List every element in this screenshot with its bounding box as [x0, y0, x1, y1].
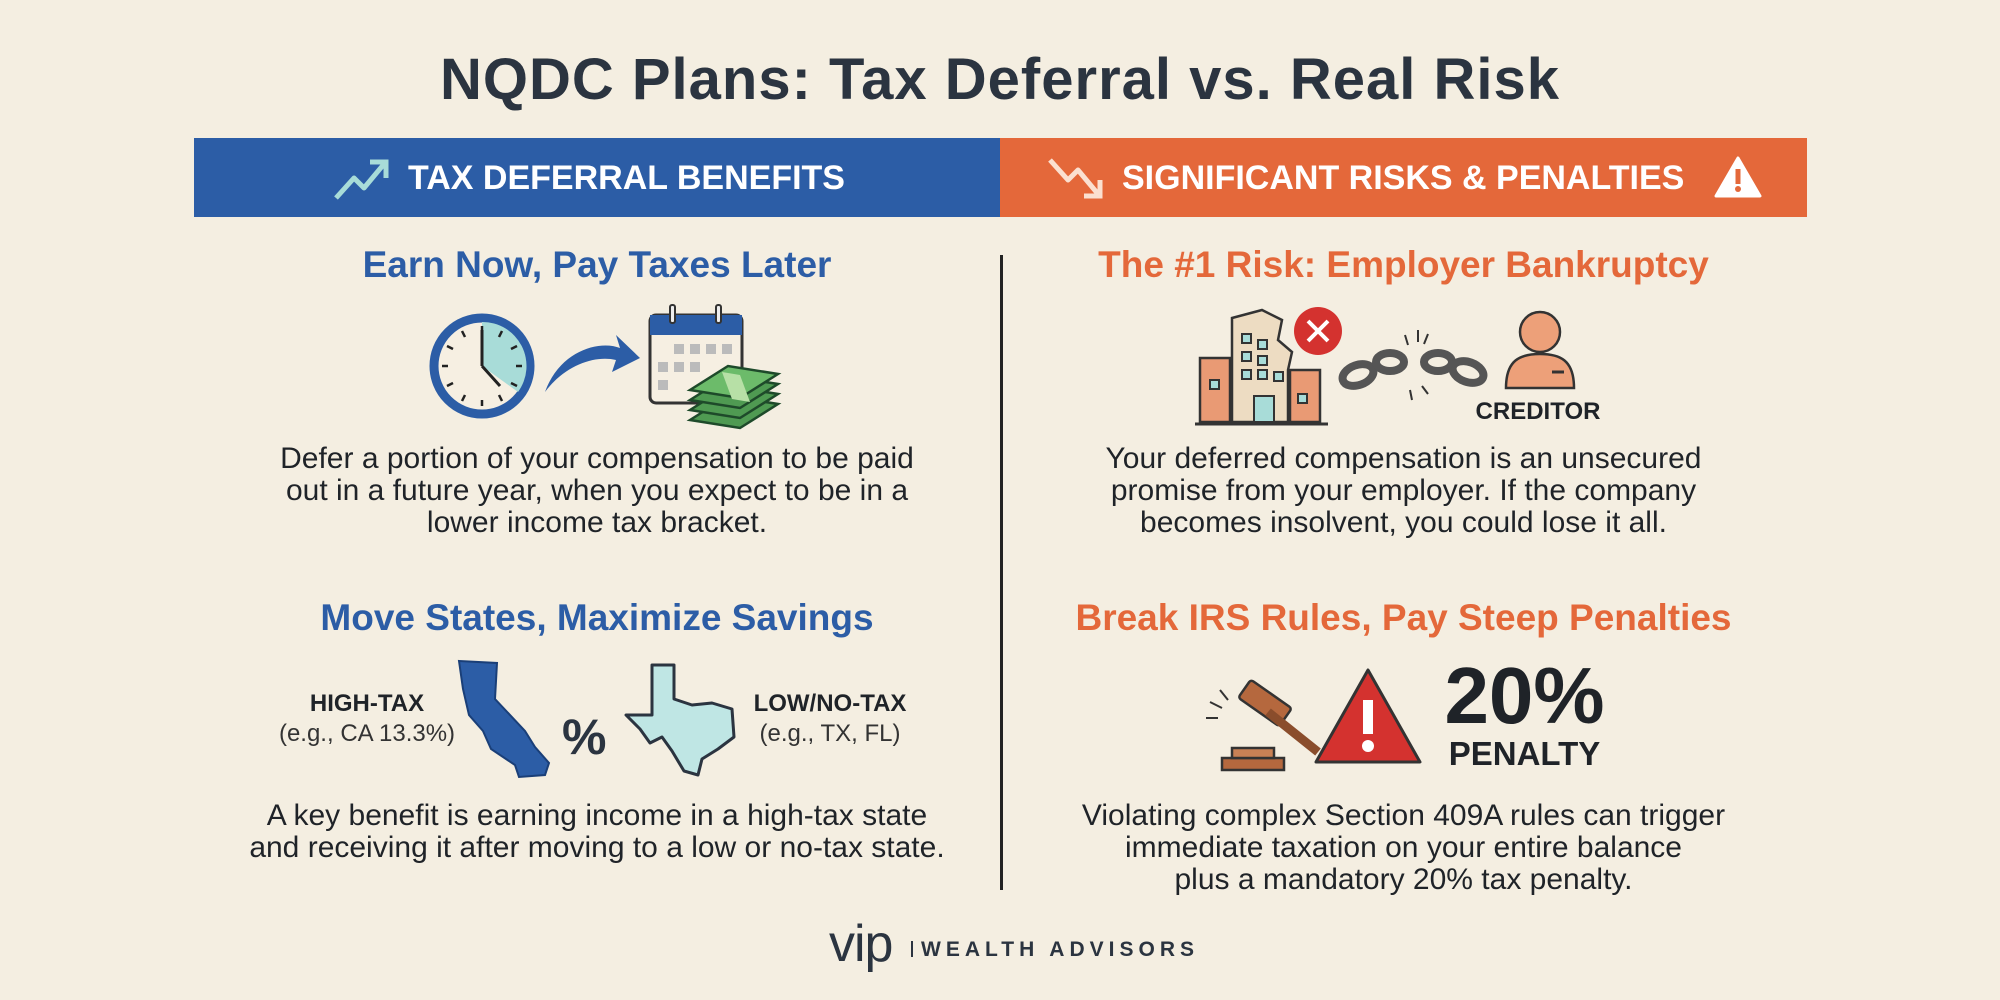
heading: bankruptcy: The #1 Risk: Employer Bankruptcy	[1098, 244, 1709, 285]
divider	[1000, 255, 1003, 890]
logo: WEALTH ADVISORS	[921, 938, 1199, 961]
label: high-tax: (e.g., CA 13.3%)	[279, 720, 455, 747]
icon: down arrow	[1048, 158, 1102, 198]
title: NQDC Plans: Tax Deferral vs. Real Risk	[440, 47, 1560, 112]
icon: texas	[624, 664, 736, 776]
text: 409A: plus a mandatory 20% tax penalty.	[1174, 863, 1633, 896]
text: unsecured: becomes insolvent, you could lose it all.	[1140, 506, 1667, 539]
icon: gavel and warning	[1206, 668, 1422, 772]
icon: building chain creditor	[1195, 307, 1576, 426]
text: key benefit: and receiving it after moving to a low or no-tax state.	[249, 831, 945, 864]
label: high-tax	[279, 690, 455, 747]
icon: percent: %	[562, 709, 606, 765]
label: low tax: (e.g., TX, FL)	[760, 720, 900, 747]
banner text: SIGNIFICANT RISKS & PENALTIES	[1122, 159, 1684, 197]
icon: california	[458, 660, 550, 778]
label: low tax: LOW/NO-TAX	[754, 690, 906, 717]
label: low tax	[754, 690, 906, 747]
text: defer	[280, 442, 914, 539]
text: 409A: Violating complex Section 409A rules can trigger	[1082, 799, 1725, 832]
banner: risks	[1000, 138, 1807, 217]
logo: vip	[829, 915, 892, 973]
icon: up arrow	[334, 160, 388, 200]
logo	[829, 915, 1199, 973]
text: unsecured: promise from your employer. If the company	[1111, 474, 1696, 507]
stat: 20% penalty: PENALTY	[1449, 735, 1600, 772]
text: unsecured: Your deferred compensation is an unsecured	[1106, 442, 1701, 475]
text: 409A: immediate taxation on your entire balance	[1125, 831, 1682, 864]
text: key benefit: A key benefit is earning income in a high-tax state	[267, 799, 927, 832]
text: defer: Defer a portion of your compensation to be paid	[280, 442, 914, 475]
label: high-tax: HIGH-TAX	[310, 690, 424, 717]
text: 409A	[1082, 799, 1725, 896]
text: defer: out in a future year, when you expect to be in a	[286, 474, 908, 507]
label: creditor: CREDITOR	[1476, 398, 1600, 425]
icon: warning	[1714, 156, 1762, 198]
icon: clock to calendar money	[430, 304, 782, 430]
text: defer: lower income tax bracket.	[427, 506, 767, 539]
heading: move states: Move States, Maximize Savings	[320, 597, 874, 638]
banner text: TAX DEFERRAL BENEFITS	[408, 159, 845, 197]
heading: penalties: Break IRS Rules, Pay Steep Penalties	[1075, 597, 1732, 638]
text: unsecured	[1106, 442, 1701, 539]
stat: 20% penalty: 20%	[1444, 651, 1605, 740]
text: key benefit	[249, 799, 945, 864]
banner: benefits	[194, 138, 1000, 217]
heading: earn now: Earn Now, Pay Taxes Later	[363, 244, 831, 285]
